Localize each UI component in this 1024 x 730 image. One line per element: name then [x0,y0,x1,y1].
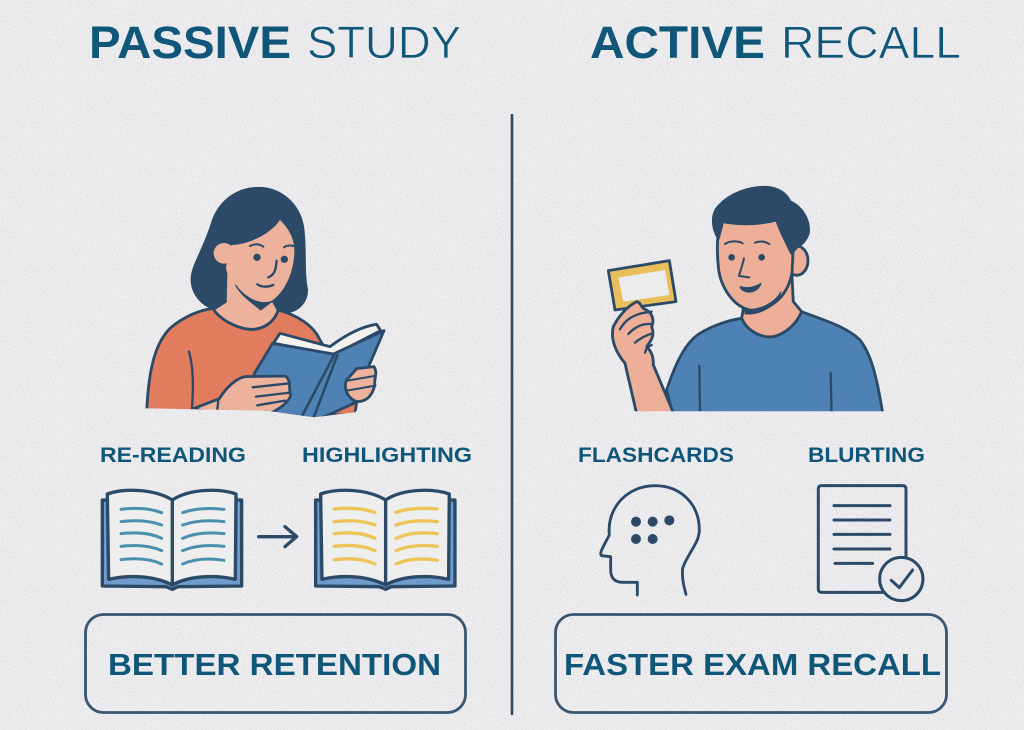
title: active recall: RECALL [781,17,961,68]
icon: arrow [259,527,297,547]
callout: better retention: BETTER RETENTION [108,647,441,682]
title: active recall: ACTIVE [590,17,765,68]
callout: better retention [86,614,466,712]
icon: document with check mark [818,486,923,601]
illustration: woman reading a book [147,188,384,422]
illustration: man holding a flashcard [608,187,883,417]
label: re-reading: RE-READING [100,444,246,467]
callout: faster exam recall: FASTER EXAM RECALL [564,647,941,682]
title: passive study: STUDY [307,17,461,68]
icon: book with blue lines [102,490,242,589]
centre divider [511,114,513,715]
icon: head with memory dots [601,486,699,595]
label: highlighting: HIGHLIGHTING [302,444,472,467]
title: passive study: PASSIVE [89,17,291,68]
icon: book with yellow highlighted lines [316,490,455,589]
label: flashcards: FLASHCARDS [578,444,734,467]
callout: faster exam recall [556,614,946,712]
label: blurting: BLURTING [808,444,925,467]
